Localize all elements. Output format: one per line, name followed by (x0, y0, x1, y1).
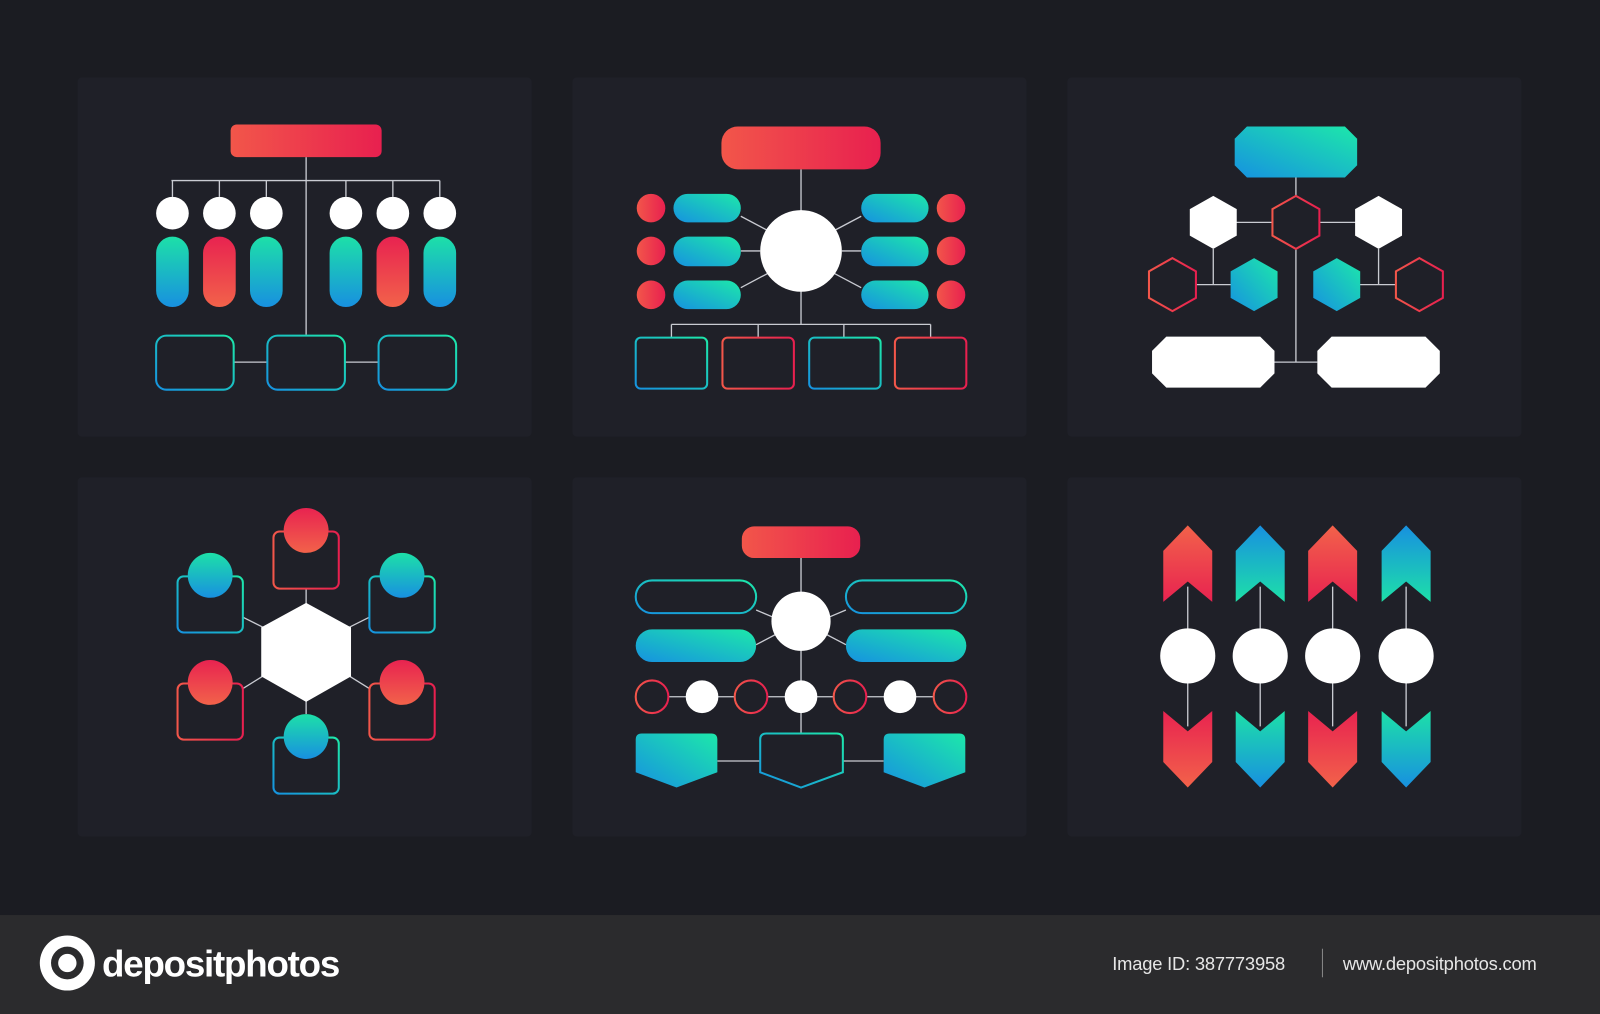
top bar (231, 124, 382, 157)
panel: hexagon tree (1067, 78, 1521, 437)
panel: circle row flow (572, 477, 1027, 836)
panel: hexagon radial (78, 477, 532, 836)
image id: Image ID: 387773958 (1112, 953, 1285, 974)
website: www.depositphotos.com (1342, 953, 1537, 974)
panel: arrows and circles (1067, 477, 1521, 836)
panel: hierarchy columns (78, 78, 532, 437)
panel: central circle mind map (572, 78, 1027, 437)
icon: logo camera (40, 935, 95, 991)
logo text: depositphotos (102, 943, 339, 984)
footer bar (0, 915, 1600, 1014)
